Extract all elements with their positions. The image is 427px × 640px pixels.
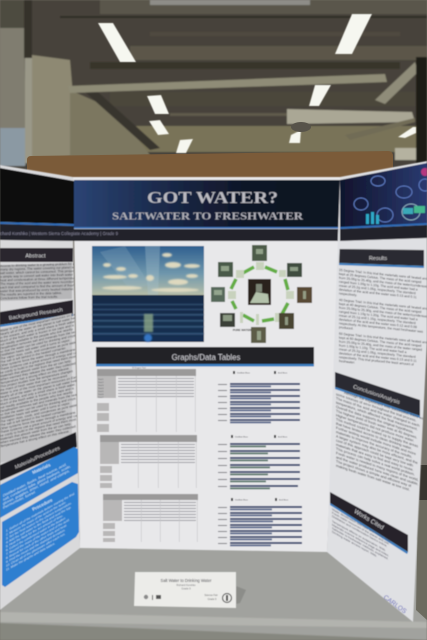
- conclusion text: Fresh water is needed in many regions of the world,: [336, 451, 418, 482]
- works cited text: Fresh water resources of the planet and use.: [332, 511, 390, 546]
- bar chart 2: Acid Mass: [278, 436, 287, 438]
- graphs heading bar: Graphs/Data Tables: [172, 353, 240, 362]
- placard: [134, 572, 246, 608]
- placard logos: Science Fair: [204, 594, 218, 597]
- center panel: [73, 177, 340, 552]
- background research text: Water is one of the most important resources on Earth.: [0, 374, 80, 396]
- background research text: Water is one of the most important resources on Earth.: [0, 311, 80, 333]
- results text: ranged from 1.00g to 1.10g. The acid and water had a: [339, 280, 418, 292]
- background research text: in the oceans, and only a small share is fresh water.: [0, 319, 76, 340]
- background research text: Nearly all of the water on the planet is salt water held: [0, 379, 77, 399]
- procedure box: 6. Collect the condensed water in the beaker.: [6, 516, 66, 552]
- results text: kept at 60 degrees Celsius. The mass of the acid ranged: [339, 336, 422, 348]
- conclusion text: materials that are easy to find and easy to reuse.: [336, 443, 414, 472]
- conclusion text: materials to improve the accuracy of the results.: [336, 430, 412, 459]
- conclusion text: The mass of the acid and the water changed in each: [336, 396, 419, 428]
- photo highlights: [214, 249, 306, 340]
- background research text: When warmed they release the water they collected.: [0, 361, 76, 382]
- bar chart 2: [218, 435, 300, 489]
- data table 1: Trial 7: [98, 397, 104, 399]
- conclusion text: Further testing would include more trials and more: [336, 426, 416, 456]
- results text: mean of 25.2g and 1.05g, respectively. The standard: [339, 347, 416, 359]
- data table 1: [97, 368, 196, 432]
- background research text: Materials that absorb water from the air can help.: [0, 422, 72, 441]
- subtitle: SALTWATER TO FRESHWATER: [112, 212, 303, 222]
- conclusion text: and the water produced here was clean and usable.: [336, 455, 418, 486]
- results heading: [338, 249, 424, 268]
- works cited text: Drinking water access report. Web.: [332, 530, 377, 558]
- procedure box: 8. Repeat for each of the other trials and heat.: [6, 523, 67, 560]
- results text: respectively. This trial produced the least amount of: [339, 355, 414, 367]
- bar chart 1: Distillate Mass: [237, 372, 250, 374]
- conclusion text: This process can help solve a real world problem.: [336, 447, 415, 477]
- placard: Salt Water to Drinking Water: [160, 578, 212, 583]
- right header pattern block: [340, 163, 427, 241]
- background research text: Much of the fresh water is frozen in ice caps and is: [0, 323, 74, 343]
- procedure box: 5. Heat the flask for the set amount of time.: [6, 513, 63, 549]
- background research text: Much of the fresh water is frozen in ice caps and is: [0, 386, 74, 406]
- background research text: be costly to build in the regions that need them most.: [0, 354, 77, 375]
- background research text: not readily available to the people who live nearby.: [0, 327, 74, 347]
- results text: from 25.00g to 25.40g, and the mass of the water ranged: [339, 340, 422, 352]
- ceiling lights: [98, 14, 416, 153]
- sponsor logo text: CARLOS: [382, 594, 408, 616]
- tri-fold board: [0, 161, 427, 622]
- conclusion text: The project shows a simple and efficient way of: [336, 459, 412, 488]
- conclusion text: that have limited access to clean drinking water.: [336, 422, 412, 451]
- placard: Grade 9: [181, 586, 191, 590]
- abstract text: [0, 262, 74, 302]
- background research text: Distillation heats salt water until it turns to vapor.: [0, 401, 70, 420]
- dark area right of the board: [418, 465, 427, 560]
- procedure box: 1. Gather all of the materials before starting the trial.: [6, 491, 75, 533]
- background research text: When warmed they release the water they collected.: [0, 424, 76, 445]
- conclusion text: cost of this approach could be kept very low with: [336, 438, 413, 468]
- ocean photo: [92, 246, 204, 342]
- works cited text: Distillation and condensation basics online.: [332, 514, 387, 548]
- results text: mean of 25.1g and 1.15g, respectively. The standard: [339, 314, 416, 325]
- graphs heading bar: [96, 347, 314, 366]
- conclusion text: making fresh water from salt water at low cost.: [336, 464, 410, 492]
- results text: kept at 40 degrees Celsius. The mass of the acid ranged: [339, 302, 422, 314]
- background research text: Materials that absorb water from the air can help.: [0, 359, 72, 378]
- results text: kept at 25 degrees Celsius. The mass of the acid ranged: [339, 272, 422, 284]
- bar chart 2: Distillate Mass: [235, 436, 248, 438]
- conclusion text: temperature, which affected the final measurement.: [336, 401, 418, 432]
- abstract text: each trial and compared to find the amount of fresh: [0, 283, 75, 290]
- conclusion analysis heading: [335, 372, 420, 418]
- abstract text: Access to drinking water is a growing problem for people in: [0, 261, 86, 268]
- conclusion text: This method could be scaled up to supply the areas: [336, 417, 418, 448]
- title: GOT WATER?: [147, 188, 278, 207]
- placard logos: Grade 9: [208, 598, 217, 601]
- green cycle arrows: [231, 267, 288, 321]
- procedure box: 3. Set the heat source to the chosen temperature.: [6, 501, 72, 541]
- conclusion text: some sources of error throughout the trial process.: [336, 392, 416, 423]
- materials box: [0, 447, 78, 518]
- materials box: Distilled water, flasks, heat source, acid,: [3, 462, 66, 498]
- conclusion analysis heading: Conclusion/Analysis: [352, 384, 401, 406]
- placard logos: [144, 594, 232, 602]
- data table 1: Trial 1: [98, 379, 104, 381]
- works cited text: Water desalination overview and history. Web.: [332, 507, 391, 544]
- conclusion text: Overall the data supports the original hypothesis.: [336, 405, 414, 434]
- warehouse ceiling background: [0, 0, 427, 180]
- background research text: Distillation heats salt water until it turns to vapor.: [0, 338, 70, 357]
- abstract text: salt water, which cannot be consumed. This project tests: [0, 269, 83, 275]
- background research heading: [0, 300, 73, 327]
- works cited text: Materials science reference page and notes.: [332, 523, 389, 558]
- materials box: thermometer, funnel.: [3, 490, 36, 510]
- abstract text: water that was produced by every heated material.: [0, 287, 74, 293]
- procedure box: [2, 482, 79, 587]
- pure water label: PURE WATER: [233, 328, 251, 332]
- background research text: be costly to build in the regions that need them most.: [0, 417, 77, 438]
- procedure box: 7. Record the mass of the water and of the acid.: [6, 518, 70, 556]
- abstract text: many dry regions. The water covering our planet is mostly: [0, 265, 85, 272]
- background research text: in the oceans, and only a small share is fresh water.: [0, 382, 76, 403]
- background research text: Temperature has a strong effect on this release.: [0, 429, 70, 448]
- data table 1: Trial 4: [98, 388, 104, 390]
- results text: ranged from 1.10g to 1.20g. The acid and water had a: [339, 310, 418, 321]
- conclusion text: Higher temperatures did not produce more water.: [336, 413, 414, 443]
- procedure box: 11. Make the graphs and data tables.: [6, 541, 55, 572]
- background research text: Temperature has a strong effect on this release.: [0, 366, 70, 385]
- works cited heading: Works Cited: [353, 508, 385, 532]
- background research text: the mass of fresh water that can be recovered.: [0, 374, 68, 392]
- materials box: salt, condenser tube, glass beakers, scale,: [3, 464, 71, 502]
- center title band: [74, 180, 340, 241]
- results text: 25 Degree Trial: In this trial the materials were all heated and: [339, 268, 427, 281]
- background research text: Nearly all of the water on the planet is salt water held: [0, 316, 77, 336]
- data table 2: [100, 435, 197, 488]
- materials and procedures heading: [0, 432, 77, 481]
- abstract text: heat and condensation at three different temperatures.: [0, 276, 80, 282]
- bar chart 3: Distillate Mass: [235, 498, 248, 502]
- left header block: [0, 168, 74, 241]
- desalination cycle diagram: [211, 245, 312, 343]
- procedure box: 9. Find the mean and the standard deviation.: [6, 528, 65, 564]
- background research text: The salt is left behind in the heated container.: [0, 346, 66, 364]
- center photo: [248, 279, 271, 305]
- results heading: Results: [369, 256, 387, 262]
- right panel: [327, 161, 427, 622]
- background research text: Desalination removes salt and minerals from the sea: [0, 330, 77, 350]
- security camera: [291, 122, 311, 132]
- background research text: This project studies how the temperature changes: [0, 369, 73, 389]
- table surface: [0, 540, 427, 640]
- process photos: [211, 245, 312, 343]
- background research text: These systems use a great amount of energy and can: [0, 413, 79, 434]
- background research text: The vapor rises, cools, and condenses as pure water.: [0, 340, 78, 361]
- procedure box: 2. Measure the mass of the acid on the scale.: [6, 500, 66, 537]
- background research text: so that the water can be used for drinking and crops.: [0, 396, 77, 417]
- data table 1: Trial 6: [98, 394, 104, 396]
- data table 1: 25 Degree Trial: [132, 368, 146, 370]
- cardboard board back: [27, 151, 393, 180]
- abstract text: The mass of the acid and the water were recorded in: [0, 280, 77, 286]
- abstract text: The results are reported in the data tables.: [0, 291, 62, 297]
- works cited text: Temperature effects on evaporation. Web.: [332, 519, 386, 553]
- left panel: [0, 165, 118, 610]
- results text: deviation of the acid and the water was 0.12 and 0.09: [339, 317, 417, 329]
- background research text: [0, 311, 80, 463]
- results text: produced.: [339, 325, 354, 331]
- bar chart 1: [218, 371, 300, 423]
- background research text: The salt is left behind in the heated container.: [0, 409, 66, 427]
- results text: respectively.: [339, 291, 357, 297]
- results text: respectively. At this temperature, the most freshwater was: [339, 321, 423, 334]
- abstract text: Conclusions follow from the trial results.: [0, 295, 58, 300]
- results text: mean of 25.2g and 1.05g, respectively. The standard: [339, 284, 416, 295]
- bar chart 3: [218, 498, 302, 546]
- results text: deviation of the acid and the water was 0.13 and 0.11: [339, 351, 417, 363]
- data table 1: Trial 2: [98, 382, 104, 384]
- results text: 40 Degree Trial: In this trial the materials were all heated and: [339, 298, 427, 311]
- conclusion text: Although the experiment was successful, there were: [344, 391, 427, 422]
- data table 1: Trial 5: [98, 391, 104, 393]
- works cited heading: [330, 492, 408, 554]
- background research text: so that the water can be used for drinking and crops.: [0, 333, 77, 354]
- data table 1: Trial 3: [98, 385, 104, 387]
- results text: 60 Degree Trial: In this trial the materials were all heated and: [339, 332, 427, 345]
- bar chart 1: Acid Mass: [278, 372, 287, 374]
- abstract text: a simple way to convert salt water into fresh water using: [0, 272, 82, 279]
- background research text: The vapor rises, cools, and condenses as pure water.: [0, 403, 78, 424]
- results text: freshwater.: [339, 359, 355, 365]
- works cited text: Saltwater to freshwater methods, explained.: [332, 526, 389, 561]
- procedure box: 10. Clean all of the glassware after each run.: [6, 532, 65, 568]
- placard: Richard Korshko: [176, 583, 196, 587]
- abstract heading: Abstract: [25, 254, 46, 260]
- conclusion text: The highest yield of fresh water was at 40 degrees.: [336, 409, 417, 440]
- abstract heading: [0, 248, 73, 262]
- results text: from 25.00g to 25.30g, and the mass of the water/condensed: [339, 306, 427, 319]
- background research text: Other systems force the water through a membrane.: [0, 347, 76, 368]
- bar chart 3: Acid Mass: [279, 498, 288, 502]
- results text: from 1.00g to 1.10g. The acid and water had a: [339, 343, 407, 354]
- glassware stations: [228, 262, 294, 325]
- background research text: These systems use a great amount of energy and can: [0, 350, 79, 371]
- procedure box: 4. Add the salt water to the flask and seal the top.: [6, 505, 71, 545]
- background research heading: Background Research: [8, 307, 63, 322]
- results text: deviation of the acid and the water was 0.13 and 0.11: [339, 288, 417, 299]
- data table 3: [103, 494, 198, 542]
- procedure box: Procedure: [31, 497, 54, 512]
- materials box: Materials: [31, 462, 52, 475]
- background research text: Desalination removes salt and minerals from the sea: [0, 393, 77, 413]
- materials box: gloves, goggles, timer, stand, and clamps,: [3, 469, 70, 506]
- background research text: Other systems force the water through a membrane.: [0, 410, 76, 431]
- results text: from 25.00g to 25.40g, and the mass of the water/condensed: [339, 276, 427, 289]
- conclusion text: A larger system may also be more efficient, and the: [336, 434, 418, 465]
- materials and procedures heading: Materials/Procedures: [14, 445, 62, 471]
- background research text: not readily available to the people who live nearby.: [0, 390, 74, 410]
